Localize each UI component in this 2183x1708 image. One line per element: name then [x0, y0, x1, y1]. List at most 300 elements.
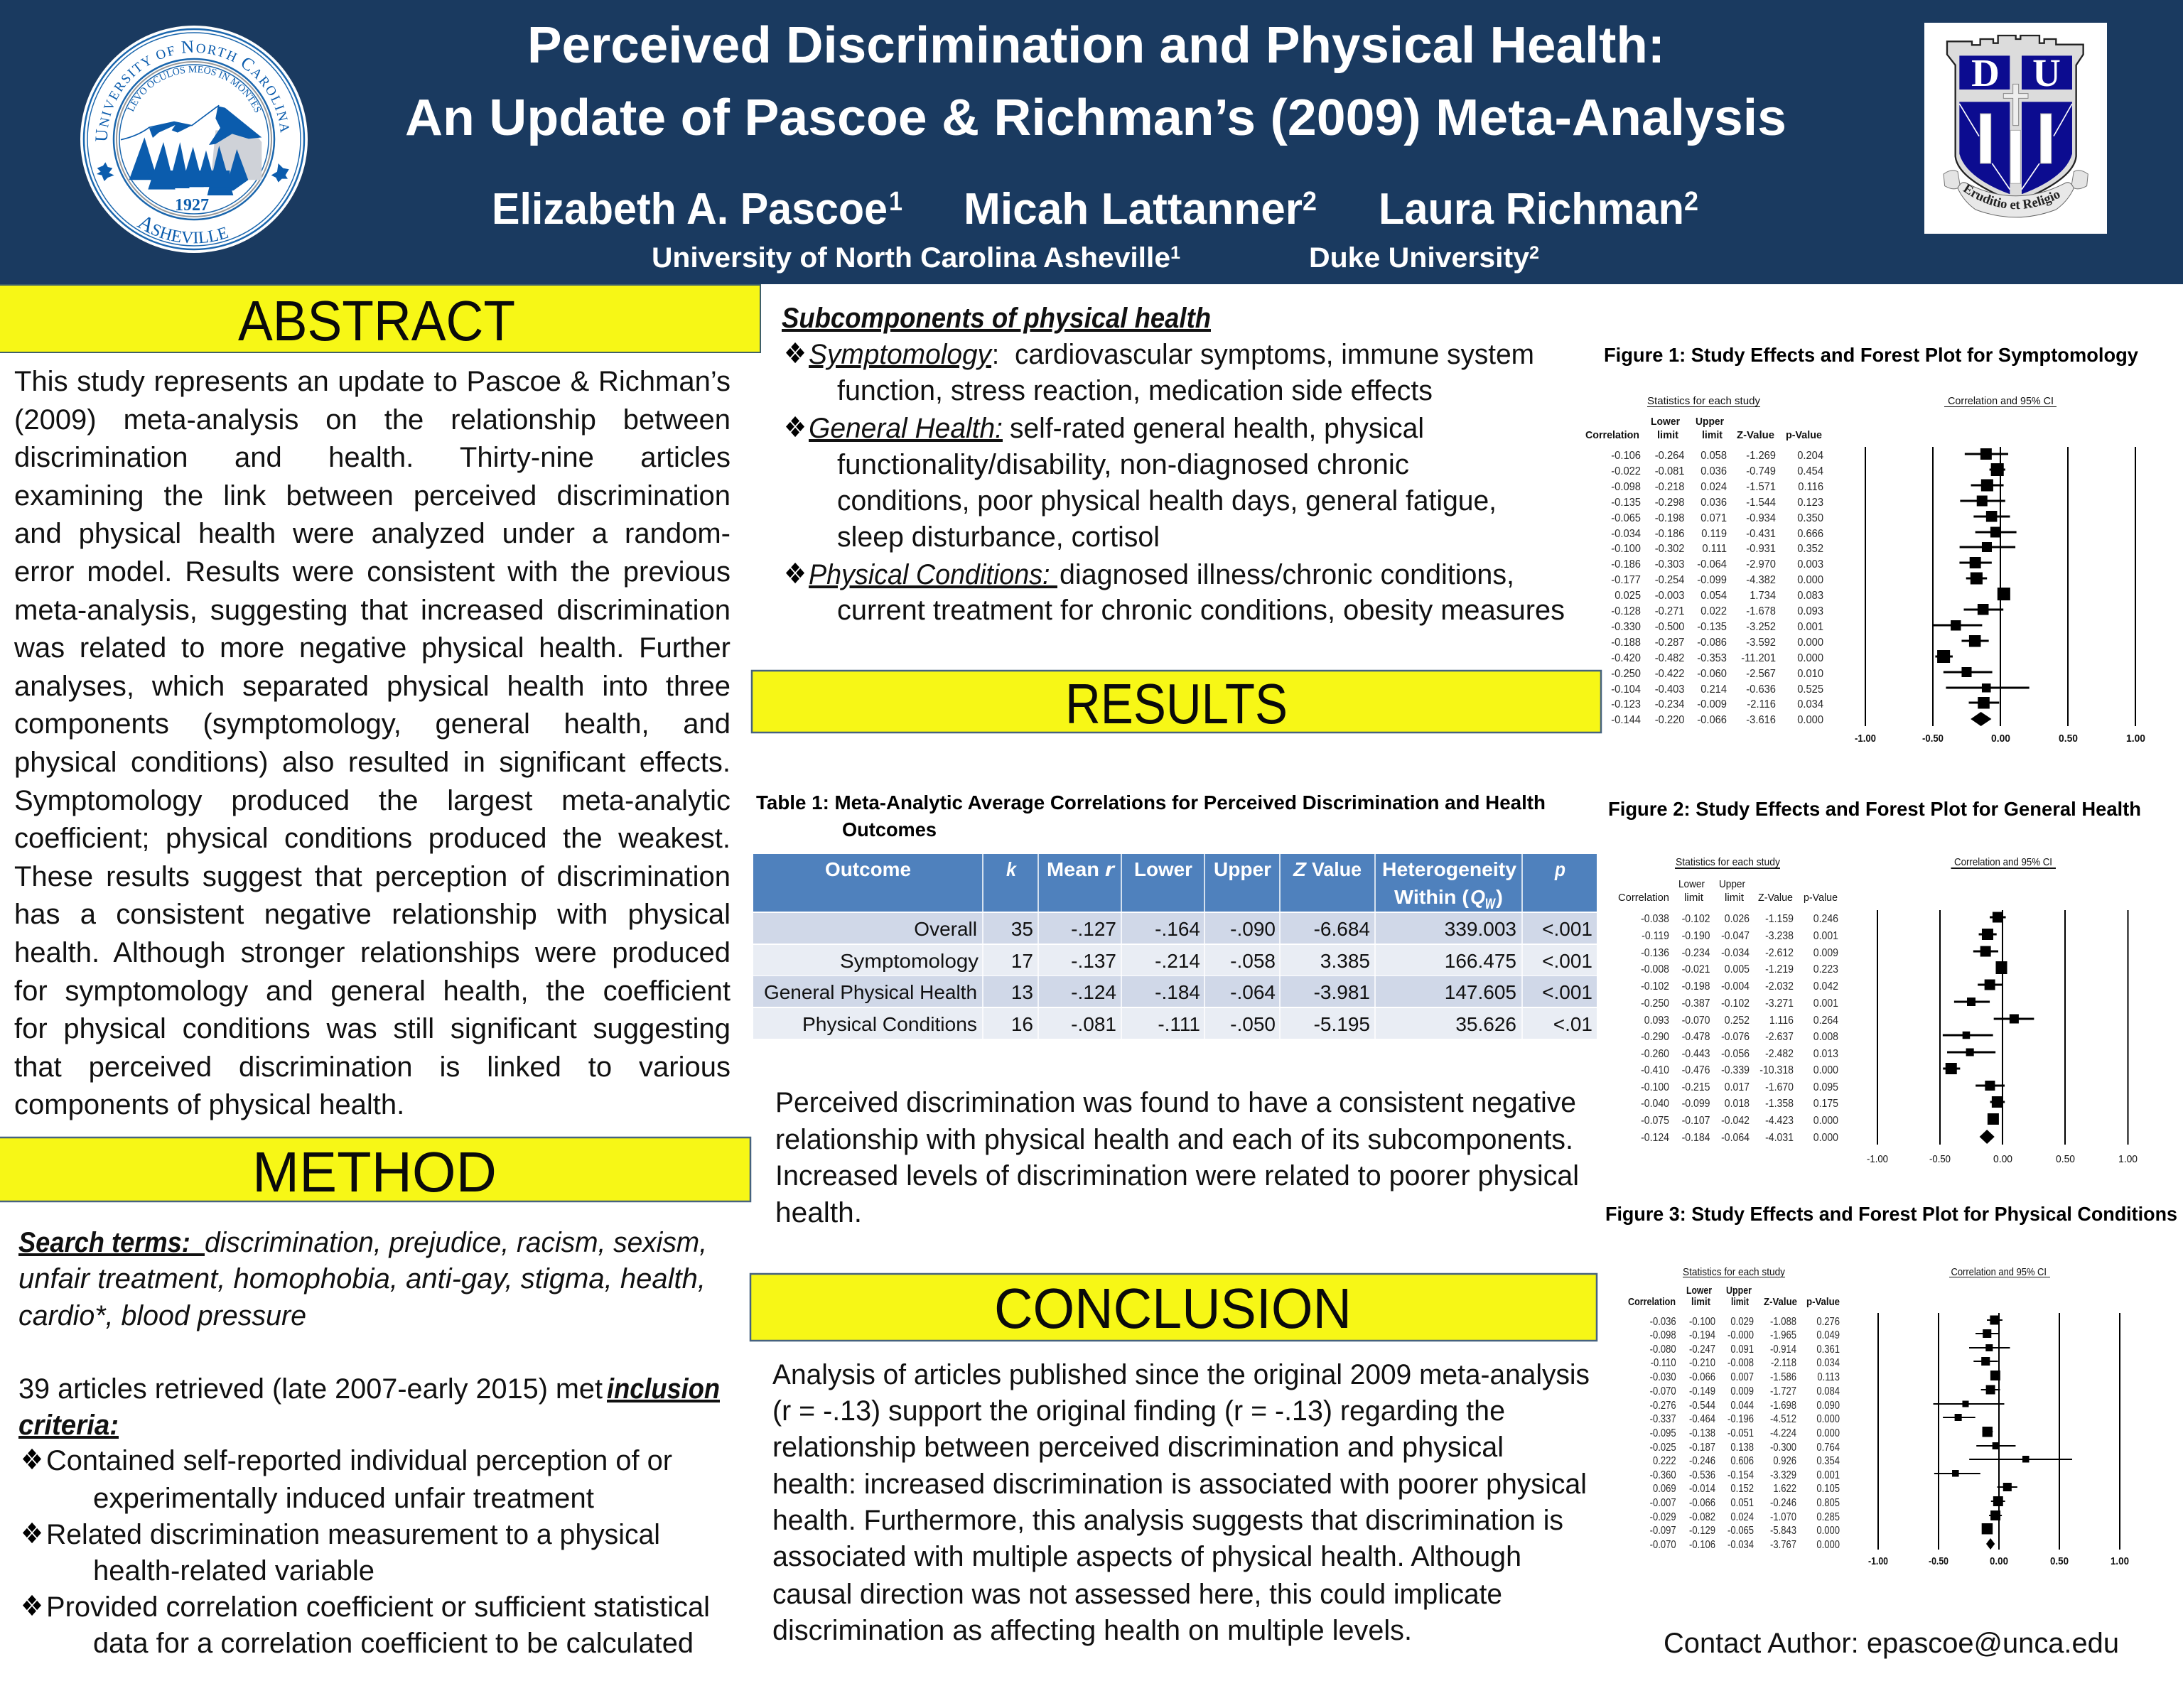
chart: figure 3 forest plot: 0.50 — [2050, 1555, 2069, 1567]
panel: results heading: RESULTS — [1065, 672, 1288, 735]
chart: figure 1 forest plot: 0.054 — [1700, 589, 1727, 602]
icon: Duke University shield: D — [1971, 51, 2000, 94]
chart: figure 3 forest plot: 1.00 — [2111, 1555, 2129, 1567]
chart: figure 1 forest plot: 0.352 — [1797, 542, 1823, 555]
chart: figure 1 forest plot: -0.009 — [1697, 698, 1727, 710]
chart: figure 3 forest plot: -0.065 — [1727, 1525, 1754, 1537]
table rows: 13 — [1011, 981, 1033, 1003]
chart: figure 1 forest plot: -0.065 — [1611, 512, 1641, 524]
chart: figure 1 forest plot: -2.970 — [1746, 558, 1776, 571]
chart: figure 3 forest plot: 0.361 — [1816, 1344, 1840, 1356]
chart: figure 1 forest plot: 1.734 — [1750, 589, 1776, 602]
chart: figure 2 forest plot: -10.318 — [1759, 1064, 1794, 1076]
chart: figure 1 forest plot: -2.116 — [1747, 698, 1776, 710]
figure 2 caption: Figure 2: Study Effects and Forest Plot for General Health — [1608, 798, 2141, 820]
table header: r — [1105, 858, 1116, 880]
chart: figure 2 forest plot: 0.246 — [1813, 912, 1838, 925]
text block: method: ❖ — [21, 1590, 43, 1623]
chart: figure 3 forest plot: -4.512 — [1770, 1413, 1796, 1425]
panel: header banner — [0, 0, 2183, 284]
chart: figure 2 forest plot: -0.50 — [1929, 1153, 1951, 1165]
chart: figure 3 forest plot: -0.246 — [1770, 1497, 1796, 1509]
chart: figure 1 forest plot: -0.934 — [1746, 512, 1776, 524]
text block: method: inclusion — [607, 1373, 720, 1405]
figure 1 caption: Figure 1: Study Effects and Forest Plot for Symptomology — [1604, 344, 2138, 366]
chart: figure 2 forest plot: -1.00 — [1867, 1153, 1888, 1165]
chart: figure 3 forest plot: -1.727 — [1770, 1385, 1796, 1398]
chart: figure 2 forest plot: 0.018 — [1725, 1097, 1750, 1110]
panel: method heading: METHOD — [252, 1140, 497, 1204]
chart: figure 2 forest plot: -2.482 — [1765, 1047, 1794, 1060]
chart: figure 3 forest plot: Z-Value — [1764, 1296, 1797, 1308]
chart: figure 3 forest plot: 0.034 — [1816, 1357, 1840, 1369]
panel: abstract heading — [0, 285, 760, 352]
chart: figure 2 forest plot: -0.040 — [1641, 1097, 1669, 1110]
text block: abstract: meta-analysis, suggesting that increased discrimination — [14, 595, 731, 626]
icon: Duke University shield: U — [2032, 51, 2061, 94]
table: meta-analytic correlations — [753, 854, 1597, 1039]
contact author: Contact Author: epascoe@unca.edu — [1664, 1628, 2119, 1659]
chart: figure 2 forest plot: -0.190 — [1682, 929, 1710, 942]
text block: conclusion: relationship between perceived discrimination and physical — [772, 1432, 1504, 1463]
chart: figure 2 forest plot: -1.219 — [1765, 963, 1794, 975]
chart: figure 1 forest plot: -0.431 — [1746, 527, 1776, 540]
chart: figure 2 forest plot: -0.004 — [1721, 980, 1750, 993]
chart: figure 3 forest plot: -0.110 — [1651, 1357, 1676, 1369]
table rows: -.137 — [1071, 950, 1116, 972]
chart: figure 1 forest plot: Correlation and 95% CI — [1948, 395, 2054, 407]
table header: Heterogeneity — [1382, 858, 1516, 880]
chart: figure 1 forest plot: -0.303 — [1655, 558, 1684, 571]
text block: conclusion: health: increased discrimination is associated with poorer physical — [772, 1469, 1587, 1500]
text block: abstract: has a consistent negative relationship with physical — [14, 899, 731, 930]
chart: figure 2 forest plot: limit — [1684, 892, 1704, 904]
panel: results heading — [752, 671, 1601, 735]
chart: figure 3 forest plot: -0.029 — [1650, 1511, 1676, 1523]
text block: method: Contained self-reported individual perception of or — [46, 1445, 672, 1476]
table rows: 166.475 — [1445, 950, 1516, 972]
chart: figure 1 forest plot: -1.678 — [1746, 605, 1776, 617]
chart: figure 2 forest plot: -0.038 — [1641, 912, 1669, 925]
chart: figure 1 forest plot: -0.234 — [1655, 698, 1685, 710]
chart: figure 2 forest plot: -0.102 — [1721, 997, 1750, 1010]
chart: figure 3 forest plot: 0.276 — [1816, 1316, 1840, 1328]
text block: subcomponents of physical health: Symptomology — [809, 339, 993, 370]
chart: figure 3 forest plot: 0.091 — [1730, 1344, 1754, 1356]
table title — [756, 791, 1546, 841]
chart: figure 1 forest plot: -0.302 — [1655, 542, 1684, 555]
chart: figure 3 forest plot: 0.000 — [1816, 1525, 1840, 1537]
text block: conclusion: Analysis of articles published since the original 2009 meta-analysis — [772, 1359, 1590, 1390]
chart: figure 2 forest plot: limit — [1725, 892, 1745, 904]
chart: figure 2 forest plot: -1.358 — [1765, 1097, 1794, 1110]
title — [405, 17, 1786, 146]
text block: conclusion: causal direction was not assessed here, this could implicate — [772, 1579, 1502, 1610]
authors: 2 — [1303, 187, 1317, 217]
chart: figure 3 forest plot: -0.187 — [1689, 1442, 1715, 1454]
affiliations: 2 — [1529, 243, 1539, 263]
table header: k — [1006, 858, 1017, 880]
table rows: 35 — [1011, 918, 1033, 940]
chart: figure 2 forest plot: -0.064 — [1721, 1131, 1750, 1144]
affiliations: Duke University — [1309, 242, 1530, 274]
text block: method: data for a correlation coefficient to be calculated — [93, 1628, 694, 1659]
chart: figure 1 forest plot: 0.083 — [1797, 589, 1823, 602]
table rows: <.001 — [1542, 918, 1592, 940]
text block: abstract: analyses, which separated physical health into three — [14, 671, 731, 702]
chart: figure 2 forest plot: -2.032 — [1765, 980, 1794, 993]
chart: figure 2 forest plot: 0.000 — [1813, 1131, 1838, 1144]
text block: method: Provided correlation coefficient or sufficient statistical — [46, 1591, 710, 1623]
chart: figure 2 forest plot: -0.034 — [1721, 946, 1750, 959]
chart: figure 1 forest plot: -2.567 — [1746, 667, 1776, 680]
authors: 2 — [1684, 187, 1698, 217]
chart: figure 3 forest plot: 0.069 — [1653, 1483, 1676, 1495]
table rows: Overall — [914, 918, 977, 940]
chart: figure 1 forest plot: 0.036 — [1700, 465, 1727, 477]
chart: figure 2 forest plot: -0.339 — [1721, 1064, 1750, 1076]
chart: figure 3 forest plot: -0.034 — [1727, 1539, 1754, 1551]
chart: figure 3 forest plot: 0.113 — [1817, 1371, 1840, 1383]
affiliations: University of North Carolina Asheville — [652, 242, 1170, 274]
chart: figure 3 forest plot: -0.210 — [1689, 1357, 1715, 1369]
text block: subcomponents of physical health: diagnosed illness/chronic conditions, — [1060, 559, 1514, 590]
table header: Upper — [1214, 858, 1271, 880]
chart: figure 1 forest plot: Upper — [1696, 416, 1724, 428]
chart: figure 3 forest plot: -0.066 — [1689, 1497, 1715, 1509]
chart: figure 2 forest plot: -0.042 — [1721, 1114, 1750, 1127]
chart: figure 3 forest plot: 0.805 — [1816, 1497, 1840, 1509]
chart: figure 1 forest plot: -0.064 — [1697, 558, 1727, 571]
table rows — [764, 918, 1592, 1035]
text block: results summary: relationship with physical health and each of its subcomponents. — [775, 1124, 1573, 1155]
chart: figure 1 forest plot: 0.003 — [1797, 558, 1823, 571]
chart: figure 2 forest plot: -2.612 — [1765, 946, 1794, 959]
table header: Q — [1470, 886, 1485, 908]
table rows: Symptomology — [840, 950, 979, 972]
chart: figure 1 forest plot: 0.022 — [1700, 605, 1727, 617]
icon: Duke University shield: Eruditio et Religio — [1963, 183, 2060, 209]
panel: conclusion heading — [750, 1274, 1597, 1341]
chart: figure 2 forest plot: Correlation and 95% CI — [1954, 856, 2052, 868]
chart: figure 3 forest plot: -0.337 — [1650, 1413, 1676, 1425]
chart: figure 3 forest plot: -0.014 — [1689, 1483, 1715, 1495]
chart: figure 1 forest plot: -1.269 — [1746, 449, 1776, 462]
text block: subcomponents of physical health: cardiovascular symptoms, immune system — [1015, 339, 1534, 370]
chart: figure 2 forest plot: -4.423 — [1765, 1114, 1794, 1127]
chart: figure 3 forest plot: -4.224 — [1770, 1427, 1796, 1439]
chart: figure 2 forest plot — [1618, 856, 2138, 1165]
chart: figure 2 forest plot: -1.159 — [1765, 912, 1794, 925]
text block: method: Search terms: — [18, 1227, 205, 1258]
chart: figure 1 forest plot: -0.186 — [1655, 527, 1684, 540]
chart: figure 3 forest plot: -0.536 — [1689, 1469, 1715, 1481]
chart: figure 2 forest plot: Upper — [1719, 878, 1745, 890]
chart: figure 1 forest plot: -0.034 — [1611, 527, 1641, 540]
chart: figure 3 forest plot: -0.082 — [1689, 1511, 1715, 1523]
chart: figure 1 forest plot: 0.000 — [1797, 573, 1823, 586]
table rows: 3.385 — [1320, 950, 1370, 972]
text block: subcomponents of physical health: ❖ — [784, 337, 807, 370]
table rows: <.001 — [1542, 981, 1592, 1003]
chart: figure 1 forest plot: -0.060 — [1697, 667, 1727, 680]
icon: UNC Asheville seal: LEVO OCULOS MEOS IN MONTES — [126, 65, 262, 112]
chart: figure 1 forest plot: 0.50 — [2059, 733, 2078, 745]
chart: figure 1 forest plot: 0.214 — [1700, 683, 1727, 696]
chart: figure 2 forest plot: -0.260 — [1641, 1047, 1669, 1060]
authors: Laura Richman — [1379, 185, 1684, 234]
table rows: -3.981 — [1314, 981, 1370, 1003]
chart: figure 3 forest plot: -0.080 — [1650, 1344, 1676, 1356]
chart: figure 3 forest plot: 0.222 — [1653, 1455, 1676, 1467]
chart: figure 1 forest plot: -0.931 — [1746, 542, 1776, 555]
chart: figure 2 forest plot: 0.009 — [1813, 946, 1838, 959]
chart: figure 3 forest plot: -2.118 — [1771, 1357, 1796, 1369]
chart: figure 1 forest plot: -0.098 — [1611, 480, 1641, 493]
chart: figure 2 forest plot: -0.100 — [1641, 1081, 1669, 1093]
table rows: -.184 — [1155, 981, 1200, 1003]
chart: figure 2 forest plot: -3.271 — [1765, 997, 1794, 1010]
chart: figure 1 forest plot: -0.403 — [1655, 683, 1684, 696]
table rows: -.081 — [1071, 1013, 1116, 1035]
affiliations: 1 — [1170, 243, 1180, 263]
chart: figure 1 forest plot: -0.135 — [1697, 620, 1727, 633]
text block: conclusion: (r = -.13) support the original finding (r = -.13) regarding the — [772, 1395, 1505, 1427]
panel: method heading — [0, 1137, 750, 1204]
table rows: <.001 — [1542, 950, 1592, 972]
chart: figure 1 forest plot: -0.50 — [1922, 733, 1944, 745]
chart: figure 2 forest plot: -3.238 — [1765, 929, 1794, 942]
chart: figure 3 forest plot: Upper — [1726, 1285, 1752, 1297]
chart: figure 1 forest plot: 0.666 — [1797, 527, 1823, 540]
icon: UNC Asheville seal: 1927 — [175, 196, 209, 215]
table rows: -.111 — [1158, 1013, 1200, 1035]
chart: figure 2 forest plot: 0.50 — [2056, 1153, 2075, 1165]
chart: figure 1 forest plot: limit — [1702, 429, 1723, 441]
text block: method: discrimination, prejudice, racism, sexism, — [205, 1227, 707, 1258]
text block: abstract: components of physical health. — [14, 1089, 404, 1120]
table rows: -6.684 — [1314, 918, 1370, 940]
chart: figure 3 forest plot: -0.008 — [1727, 1357, 1754, 1369]
chart: figure 3 forest plot: Correlation — [1628, 1296, 1676, 1308]
chart: figure 1 forest plot: -0.353 — [1697, 652, 1727, 664]
chart: figure 2 forest plot: 0.252 — [1725, 1014, 1750, 1027]
chart: figure 3 forest plot: 0.024 — [1730, 1511, 1754, 1523]
chart: figure 1 forest plot: 0.454 — [1797, 465, 1823, 477]
text block: subcomponents of physical health: function, stress reaction, medication side effects — [837, 375, 1433, 406]
chart: figure 3 forest plot: 0.007 — [1730, 1371, 1754, 1383]
chart: figure 3 forest plot: -1.698 — [1770, 1400, 1796, 1412]
chart: figure 1 forest plot: -0.254 — [1655, 573, 1685, 586]
figure 3 caption: Figure 3: Study Effects and Forest Plot for Physical Conditions — [1605, 1203, 2177, 1225]
chart: figure 3 forest plot: 0.606 — [1730, 1455, 1754, 1467]
chart: figure 3 forest plot: 0.105 — [1816, 1483, 1840, 1495]
table header: w — [1485, 891, 1496, 913]
chart: figure 1 forest plot: -0.330 — [1611, 620, 1641, 633]
chart: figure 1 forest plot: 0.116 — [1798, 480, 1823, 493]
chart: figure 2 forest plot: -0.099 — [1682, 1097, 1710, 1110]
chart: figure 2 forest plot: -0.102 — [1682, 912, 1710, 925]
chart: figure 2 forest plot: -1.670 — [1765, 1081, 1794, 1093]
chart: figure 3 forest plot: -0.106 — [1689, 1539, 1715, 1551]
chart: figure 2 forest plot: -0.119 — [1642, 929, 1669, 942]
chart: figure 2 forest plot: -0.290 — [1641, 1030, 1669, 1043]
chart: figure 1 forest plot: -0.099 — [1697, 573, 1727, 586]
chart: figure 2 forest plot: -0.076 — [1721, 1030, 1750, 1043]
chart: figure 3 forest plot: -0.098 — [1650, 1329, 1676, 1341]
chart: figure 2 forest plot: -0.102 — [1641, 980, 1669, 993]
chart: figure 3 forest plot: Statistics for each study — [1683, 1266, 1785, 1278]
chart: figure 1 forest plot: -0.003 — [1655, 589, 1684, 602]
chart: figure 3 forest plot: 1.622 — [1773, 1483, 1796, 1495]
chart: figure 2 forest plot: 0.095 — [1813, 1081, 1838, 1093]
text block: subcomponents of physical health: ❖ — [784, 558, 807, 590]
chart: figure 2 forest plot: -0.136 — [1641, 946, 1669, 959]
table header — [825, 858, 1565, 913]
chart: figure 2 forest plot: -0.075 — [1641, 1114, 1669, 1127]
chart: figure 1 forest plot: -3.252 — [1746, 620, 1776, 633]
chart: figure 3 forest plot: 0.000 — [1816, 1413, 1840, 1425]
table rows: -.214 — [1155, 950, 1200, 972]
text block: abstract: physical conditions) also resulted in significant effects. — [14, 747, 731, 778]
chart: figure 1 forest plot: -0.287 — [1655, 636, 1684, 649]
chart: figure 3 forest plot: 0.285 — [1816, 1511, 1840, 1523]
chart: figure 2 forest plot: -0.387 — [1682, 997, 1710, 1010]
authors — [492, 185, 1698, 234]
chart: figure 3 forest plot: limit — [1691, 1296, 1710, 1308]
text block: method: 39 articles retrieved (late 2007-early 2015) met — [18, 1373, 603, 1405]
chart: figure 3 forest plot: -0.070 — [1650, 1385, 1676, 1398]
chart: figure 2 forest plot: 0.093 — [1644, 1014, 1669, 1027]
chart: figure 2 forest plot: 0.005 — [1725, 963, 1750, 975]
chart: figure 2 forest plot: 0.000 — [1813, 1114, 1838, 1127]
chart: figure 1 forest plot: limit — [1657, 429, 1678, 441]
chart: figure 2 forest plot: -0.476 — [1682, 1064, 1710, 1076]
text block: subcomponents of physical health: : — [992, 339, 999, 370]
table rows: -.050 — [1230, 1013, 1276, 1035]
text block: abstract: discrimination and health. Thirty-nine articles — [14, 442, 731, 473]
chart: figure 3 forest plot: -0.247 — [1689, 1344, 1715, 1356]
chart: figure 1 forest plot: -0.482 — [1655, 652, 1684, 664]
chart: figure 2 forest plot: 0.042 — [1813, 980, 1838, 993]
chart: figure 2 forest plot: -0.107 — [1682, 1114, 1710, 1127]
text block: conclusion: health. Furthermore, this analysis suggests that discrimination is — [772, 1505, 1563, 1536]
chart: figure 3 forest plot: 0.00 — [1990, 1555, 2008, 1567]
chart: figure 3 forest plot: p-Value — [1806, 1296, 1840, 1308]
chart: figure 1 forest plot: 0.010 — [1797, 667, 1823, 680]
text block: abstract: was related to more negative physical health. Further — [14, 632, 731, 664]
chart: figure 2 forest plot: 0.175 — [1813, 1097, 1838, 1110]
chart: figure 2 forest plot: p-Value — [1804, 892, 1838, 904]
chart: figure 1 forest plot: -0.106 — [1611, 449, 1641, 462]
chart: figure 3 forest plot: -0.300 — [1770, 1442, 1796, 1454]
table rows: -.058 — [1230, 950, 1276, 972]
chart: figure 1 forest plot: -0.749 — [1746, 465, 1776, 477]
chart: figure 3 forest plot: -0.030 — [1650, 1371, 1676, 1383]
chart: figure 3 forest plot: -0.914 — [1770, 1344, 1796, 1356]
chart: figure 1 forest plot: 0.111 — [1702, 542, 1727, 555]
chart: figure 3 forest plot: -0.464 — [1689, 1413, 1715, 1425]
chart: figure 3 forest plot: -0.095 — [1650, 1427, 1676, 1439]
authors: 1 — [889, 187, 902, 217]
chart: figure 2 forest plot: 0.223 — [1813, 963, 1838, 975]
chart: figure 1 forest plot: -0.218 — [1655, 480, 1684, 493]
chart: figure 3 forest plot: -1.070 — [1770, 1511, 1796, 1523]
chart: figure 1 forest plot: 0.058 — [1700, 449, 1727, 462]
text block: subcomponents of physical health: self-rated general health, physical — [1010, 413, 1424, 444]
chart: figure 3 forest plot: -3.329 — [1770, 1469, 1796, 1481]
chart: figure 3 forest plot: -5.843 — [1770, 1525, 1796, 1537]
chart: figure 2 forest plot: 0.008 — [1813, 1030, 1838, 1043]
chart: figure 3 forest plot: 0.090 — [1816, 1400, 1840, 1412]
chart: figure 3 forest plot: 0.138 — [1730, 1442, 1754, 1454]
table rows: 147.605 — [1445, 981, 1516, 1003]
text block: abstract: that perceived discrimination is linked to various — [14, 1052, 731, 1083]
chart: figure 1 forest plot: 0.119 — [1701, 527, 1727, 540]
chart: figure 1 forest plot: 0.00 — [1991, 733, 2010, 745]
text block: results summary — [775, 1087, 1579, 1228]
text block: results summary: Increased levels of discrimination were related to poorer physical — [775, 1160, 1579, 1191]
table rows: <.01 — [1553, 1013, 1592, 1035]
text block: subcomponents of physical health: current treatment for chronic conditions, obesity measures — [837, 595, 1565, 626]
chart: figure 1 forest plot: Lower — [1651, 416, 1680, 428]
chart: figure 3 forest plot: limit — [1731, 1296, 1749, 1308]
chart: figure 1 forest plot: -0.135 — [1611, 496, 1641, 509]
chart: figure 3 forest plot: -0.066 — [1689, 1371, 1715, 1383]
text block: abstract: error model. Results were consistent with the previous — [14, 556, 731, 588]
table header: Mean — [1047, 858, 1099, 880]
chart: figure 2 forest plot: Lower — [1678, 878, 1705, 890]
chart: figure 3 forest plot: 0.152 — [1730, 1483, 1754, 1495]
chart: figure 2 forest plot: -0.215 — [1682, 1081, 1710, 1093]
chart: figure 3 forest plot: 0.049 — [1816, 1329, 1840, 1341]
icon: UNC Asheville seal — [80, 26, 308, 253]
icon: UNC Asheville seal: ASHEVILLE — [136, 217, 229, 243]
text block: abstract: components (symptomology, general health, and — [14, 708, 731, 740]
chart: figure 2 forest plot: -0.198 — [1682, 980, 1710, 993]
text block: abstract: These results suggest that perception of discrimination — [14, 861, 731, 892]
text block: abstract: examining the link between perceived discrimination — [14, 480, 731, 512]
table title: Outcomes — [842, 818, 937, 841]
chart: figure 1 forest plot: -3.592 — [1746, 636, 1776, 649]
chart: figure 1 forest plot: 0.093 — [1797, 605, 1823, 617]
text block: method: cardio*, blood pressure — [18, 1300, 306, 1331]
chart: figure 2 forest plot: -0.124 — [1641, 1131, 1669, 1144]
text block: subcomponents of physical health: sleep disturbance, cortisol — [837, 521, 1160, 553]
chart: figure 1 forest plot: -0.104 — [1611, 683, 1641, 696]
chart: figure 3 forest plot: -0.129 — [1689, 1525, 1715, 1537]
text block: abstract: This study represents an update to Pascoe & Richman’s — [14, 366, 731, 397]
text block: method: health-related variable — [93, 1555, 374, 1587]
chart: figure 1 forest plot: 0.071 — [1700, 512, 1727, 524]
table header: Within ( — [1394, 886, 1470, 908]
chart: figure 1 forest plot: -0.422 — [1655, 667, 1684, 680]
chart: figure 3 forest plot: 0.051 — [1730, 1497, 1754, 1509]
chart: figure 3 forest plot: -1.088 — [1770, 1316, 1796, 1328]
chart: figure 1 forest plot: -0.636 — [1746, 683, 1776, 696]
chart: figure 3 forest plot: 0.926 — [1773, 1455, 1796, 1467]
authors: Micah Lattanner — [964, 185, 1303, 234]
chart: figure 1 forest plot: 0.204 — [1797, 449, 1823, 462]
chart: figure 2 forest plot: -0.443 — [1682, 1047, 1710, 1060]
chart: figure 2 forest plot: -0.410 — [1641, 1064, 1669, 1076]
chart: figure 1 forest plot: -0.022 — [1611, 465, 1641, 477]
chart: figure 3 forest plot: -0.149 — [1689, 1385, 1715, 1398]
chart: figure 3 forest plot: 0.044 — [1730, 1400, 1754, 1412]
chart: figure 1 forest plot: -11.201 — [1741, 652, 1776, 664]
chart: figure 1 forest plot: -1.00 — [1855, 733, 1876, 745]
table rows: -.124 — [1071, 981, 1116, 1003]
